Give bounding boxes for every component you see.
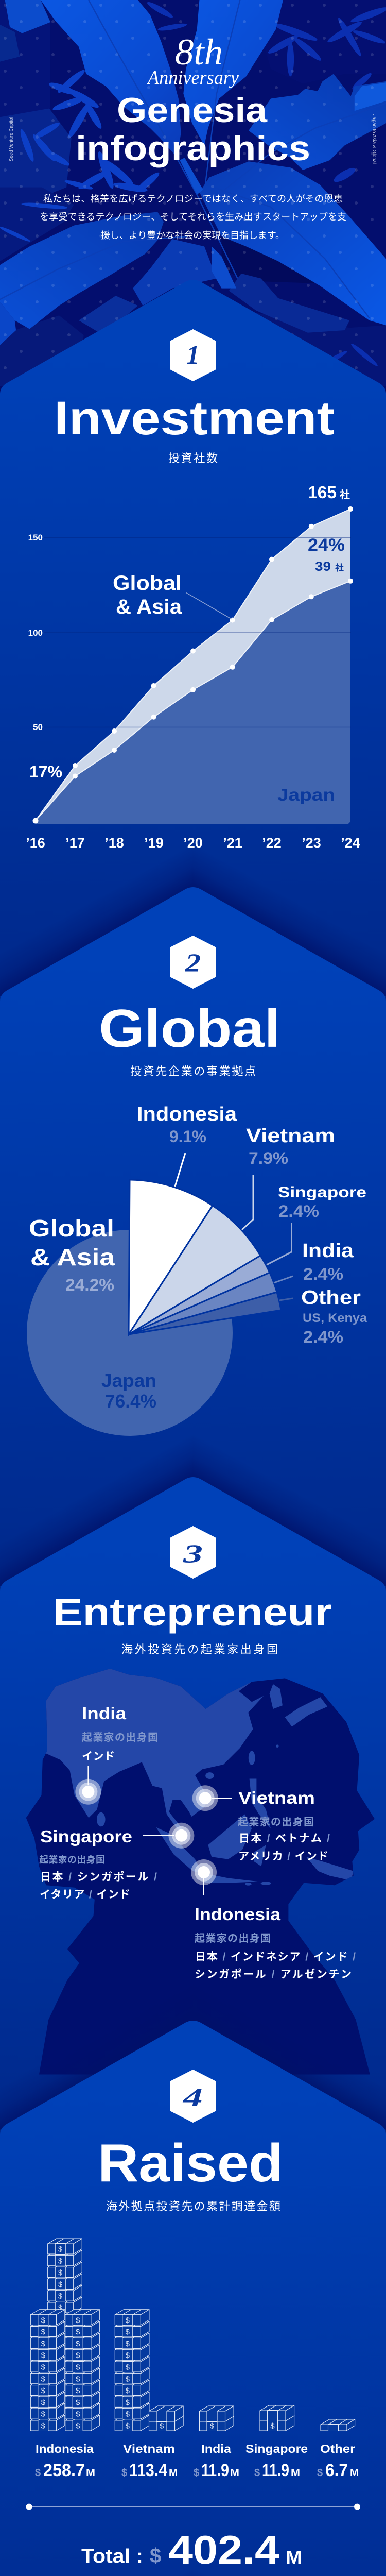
y axis labels: 150	[28, 533, 43, 543]
label: vietnam: 7.9%	[249, 1149, 288, 1167]
indonesia left stack: $	[41, 2351, 46, 2360]
raised: vietnam: Vietnam	[123, 2442, 175, 2455]
raised: indonesia	[35, 2442, 95, 2480]
heading: Raised: Raised	[98, 2133, 283, 2193]
raised: indonesia: M	[86, 2467, 95, 2479]
vietnam small stack	[149, 2406, 183, 2431]
indonesia tower: $	[58, 2304, 63, 2312]
slice: india	[129, 1273, 277, 1334]
indonesia left stack: $	[41, 2386, 46, 2395]
vietnam small stack: $	[160, 2421, 164, 2431]
side text: Japan to Asia & Global: Japan to Asia & Global	[371, 114, 377, 164]
panel: section 2 global	[0, 836, 386, 1633]
india stack: $	[210, 2421, 215, 2431]
label: india: India	[302, 1240, 354, 1262]
vietnam stack: $	[126, 2421, 130, 2431]
indonesia tower	[48, 2239, 82, 2313]
label: indonesia: 起業家の出身国	[195, 1933, 271, 1944]
label: vietnam: 起業家の出身国	[238, 1816, 314, 1828]
indonesia tower: $	[58, 2292, 63, 2301]
pin: vietnam	[192, 1785, 232, 1811]
label: global and asia: & Asia	[30, 1244, 115, 1270]
indonesia left stack: $	[41, 2398, 46, 2407]
slice: singapore	[129, 1256, 270, 1334]
raised: singapore: $	[254, 2467, 260, 2479]
vietnam stack: $	[126, 2363, 130, 2372]
indonesia left stack: $	[41, 2340, 46, 2348]
label: 24 percent 39 companies: 39	[315, 560, 331, 574]
label: vietnam: アメリカ / インド	[238, 1851, 328, 1862]
subheading: 投資先企業の事業拠点	[130, 1065, 256, 1078]
vietnam stack: $	[126, 2328, 130, 2336]
indonesia left stack: $	[41, 2363, 46, 2372]
vietnam stack: $	[126, 2386, 130, 2395]
intro paragraph: を享受できるテクノロジー、そしてそれらを生み出すスタートアップを支	[40, 212, 346, 222]
x axis labels: ’21	[223, 835, 242, 851]
label: 165 companies: 165	[308, 483, 337, 502]
label: global and asia: Global	[29, 1215, 114, 1242]
raised: other: M	[350, 2467, 359, 2479]
map: two head silhouettes with asia	[26, 1663, 375, 2075]
label: japan: Japan	[277, 785, 335, 804]
label: india	[82, 1704, 158, 1762]
main title line 2: infographics	[76, 129, 310, 168]
slice: other	[129, 1292, 281, 1334]
vietnam stack: $	[126, 2340, 130, 2348]
label: 24 percent 39 companies: 社	[335, 563, 344, 573]
label: global and asia	[113, 572, 182, 618]
slice: indonesia	[129, 1180, 213, 1334]
vietnam stack: $	[126, 2398, 130, 2407]
label: global and asia: & Asia	[116, 596, 182, 618]
label: global and asia: Global	[113, 572, 182, 595]
heading: Entrepreneur: Entrepreneur	[53, 1590, 332, 1634]
label: india	[302, 1240, 354, 1283]
indonesia right stack: $	[76, 2340, 80, 2348]
panel: section 3 entrepreneur	[0, 1426, 386, 2174]
label: vietnam	[246, 1125, 335, 1167]
vietnam stack: $	[126, 2410, 130, 2419]
x axis labels: ’24	[341, 835, 360, 851]
subheading: 海外投資先の起業家出身国	[121, 1643, 278, 1656]
total divider	[26, 2504, 360, 2510]
leaf ribs and stems	[0, 0, 386, 318]
total amount: $	[150, 2545, 161, 2567]
label: vietnam: Vietnam	[238, 1788, 315, 1807]
global and asia band	[36, 509, 350, 821]
indonesia right stack: $	[76, 2328, 80, 2336]
subheading: 海外拠点投資先の累計調達金額	[106, 2200, 280, 2213]
raised: vietnam: M	[169, 2467, 178, 2479]
raised: indonesia: Indonesia	[36, 2442, 94, 2455]
slice: vietnam	[129, 1206, 260, 1334]
heading: Investment: Investment	[54, 392, 335, 445]
total amount: M	[286, 2547, 302, 2568]
raised: indonesia: 258.7	[43, 2461, 85, 2480]
banana leaves	[41, 0, 181, 158]
label: global and asia: 24.2%	[65, 1276, 114, 1294]
intro paragraph	[40, 194, 346, 241]
label: other: US, Kenya	[303, 1311, 367, 1325]
indonesia right stack: $	[76, 2351, 80, 2360]
label: vietnam: Vietnam	[246, 1125, 335, 1147]
indonesia right stack: $	[76, 2375, 80, 2383]
indonesia right stack: $	[76, 2398, 80, 2407]
raised: india: India	[201, 2442, 231, 2455]
vietnam stack: $	[126, 2316, 130, 2325]
label: singapore: 日本 / シンガポール /	[40, 1871, 157, 1883]
label: japan	[101, 1370, 156, 1412]
total amount: 402.4	[168, 2527, 279, 2572]
label: indonesia	[195, 1905, 356, 1980]
main title line 1: Genesia	[117, 91, 268, 130]
y axis labels: 50	[33, 722, 43, 732]
x axis labels: ’23	[302, 835, 321, 851]
anniversary script: 8th: 8th	[175, 31, 223, 73]
label: singapore: イタリア / インド	[40, 1889, 130, 1901]
hero title block	[40, 31, 346, 241]
indonesia left stack: $	[41, 2375, 46, 2383]
label: singapore: 2.4%	[278, 1202, 319, 1221]
x axis labels: ’19	[144, 835, 164, 851]
indonesia right stack: $	[76, 2421, 80, 2431]
intro paragraph: 援し、より豊かな社会の実現を目指します。	[101, 230, 285, 241]
badge 3	[171, 1527, 215, 1578]
vietnam stack: $	[126, 2351, 130, 2360]
panel: section 5 phase	[0, 2560, 386, 2576]
anniversary script: Anniversary: Anniversary	[146, 67, 239, 89]
label: japan: 76.4%	[105, 1391, 156, 1412]
indonesia right stack: $	[76, 2316, 80, 2325]
y axis labels: 100	[28, 628, 43, 638]
label: indonesia: 日本 / インドネシア / インド /	[195, 1951, 356, 1963]
indonesia tower: $	[58, 2245, 63, 2253]
raised: india	[194, 2442, 239, 2480]
label: 24 percent 39 companies: 24%	[308, 535, 345, 555]
badge 1	[171, 330, 215, 381]
label: other: Other	[301, 1287, 361, 1309]
badge 3: 3	[182, 1539, 203, 1568]
label: indonesia: Indonesia	[195, 1905, 281, 1924]
indonesia right stack: $	[76, 2363, 80, 2372]
raised: singapore: M	[291, 2467, 300, 2479]
indonesia left stack	[30, 2310, 65, 2431]
label: other	[301, 1287, 367, 1346]
raised: other: $	[317, 2467, 323, 2479]
label: singapore: 起業家の出身国	[39, 1855, 105, 1865]
label: 24 percent 39 companies	[308, 535, 345, 574]
total amount: Total :	[81, 2546, 143, 2567]
x axis labels: ’17	[65, 835, 85, 851]
raised: vietnam	[121, 2442, 178, 2480]
vietnam stack	[115, 2310, 149, 2431]
pin: india	[75, 1766, 101, 1805]
badge 2	[171, 936, 215, 988]
label: indonesia	[137, 1104, 237, 1146]
indonesia left stack: $	[41, 2316, 46, 2325]
side text: Seed Venture Capital: Seed Venture Capital	[9, 117, 14, 161]
label: india: 2.4%	[303, 1265, 343, 1283]
raised: indonesia: $	[35, 2467, 41, 2479]
panel: section 1 investment	[0, 280, 386, 1041]
indonesia left stack: $	[41, 2410, 46, 2419]
hero background: blue banana leaf photo	[0, 0, 386, 402]
pin: singapore	[143, 1823, 194, 1849]
singapore stack: $	[270, 2421, 275, 2431]
foliage fronds	[0, 67, 161, 243]
y axis labels	[28, 533, 43, 732]
japan circle	[27, 1230, 233, 1436]
raised: singapore	[245, 2442, 308, 2480]
pie chart	[27, 1104, 367, 1436]
stacked money chart	[30, 2239, 355, 2431]
singapore stack	[260, 2405, 294, 2431]
heading: Global: Global	[99, 999, 280, 1059]
x axis labels: ’22	[262, 835, 282, 851]
indonesia left stack: $	[41, 2421, 46, 2431]
leader lines	[175, 1153, 293, 1300]
raised: vietnam: 113.4	[129, 2461, 167, 2480]
label: singapore: Singapore	[278, 1184, 366, 1201]
indonesia tower: $	[58, 2280, 63, 2289]
area chart: investment count	[26, 483, 360, 851]
label: singapore: Singapore	[40, 1827, 132, 1846]
raised: other	[317, 2442, 359, 2480]
raised: india: $	[194, 2467, 199, 2479]
raised: other: Other	[320, 2442, 355, 2455]
japan area	[36, 581, 350, 824]
label: india: インド	[82, 1751, 115, 1762]
subheading: 投資社数	[168, 452, 218, 465]
raised: singapore: Singapore	[245, 2442, 308, 2455]
indonesia tower: $	[58, 2257, 63, 2265]
raised: india: M	[230, 2467, 239, 2479]
label: 165 companies	[308, 483, 350, 502]
label: 165 companies: 社	[340, 489, 350, 501]
vietnam stack: $	[126, 2375, 130, 2383]
indonesia right stack	[65, 2310, 99, 2431]
badge 4: 4	[182, 2082, 203, 2111]
x axis labels: ’16	[26, 835, 45, 851]
india stack	[200, 2406, 234, 2431]
label: indonesia: Indonesia	[137, 1104, 237, 1125]
x axis labels: ’18	[104, 835, 124, 851]
label: japan: Japan	[101, 1370, 156, 1391]
raised: other: 6.7	[325, 2461, 348, 2480]
pin: indonesia	[191, 1859, 217, 1895]
label: 17 percent: 17%	[29, 762, 62, 781]
label: india: 起業家の出身国	[82, 1732, 158, 1743]
raised: india: 11.9	[201, 2461, 229, 2480]
indonesia right stack: $	[76, 2386, 80, 2395]
raised: vietnam: $	[121, 2467, 127, 2479]
badge 2: 2	[185, 948, 201, 977]
leader line	[186, 593, 232, 619]
intro paragraph: 私たちは、格差を広げるテクノロジーではなく、すべての人がその恩恵	[43, 194, 343, 204]
indonesia left stack: $	[41, 2328, 46, 2336]
x axis labels: ’20	[183, 835, 203, 851]
label: singapore	[278, 1184, 366, 1221]
x axis labels	[26, 835, 360, 851]
indonesia tower: $	[58, 2268, 63, 2277]
total amount	[81, 2527, 302, 2572]
label: vietnam: 日本 / ベトナム /	[239, 1833, 330, 1844]
label: other: 2.4%	[303, 1328, 343, 1346]
label: vietnam	[238, 1788, 330, 1862]
panel: section 4 raised	[0, 1970, 386, 2576]
other stack	[321, 2419, 355, 2431]
raised: singapore: 11.9	[262, 2461, 289, 2480]
badge 4	[171, 2070, 215, 2122]
label: global and asia	[29, 1215, 115, 1294]
label: indonesia: 9.1%	[169, 1127, 206, 1146]
indonesia right stack: $	[76, 2410, 80, 2419]
label: singapore	[39, 1827, 157, 1901]
label: indonesia: シンガポール / アルゼンチン	[195, 1968, 352, 1980]
badge 1: 1	[186, 341, 200, 370]
label: india: India	[82, 1704, 127, 1723]
